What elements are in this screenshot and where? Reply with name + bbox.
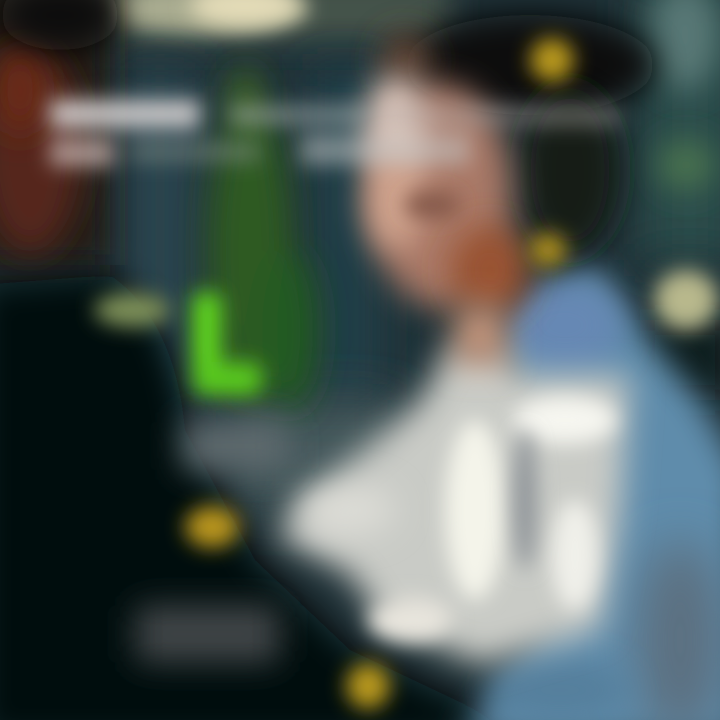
left person: dark jacket [0, 275, 540, 720]
woman: white blouse [275, 345, 630, 665]
icon: faint green marker right [658, 141, 714, 189]
callout: grey text block upper [182, 422, 287, 470]
heading: blurred white title [50, 100, 620, 166]
icon: yellow marker bottom [346, 663, 390, 709]
callout: grey text block lower [135, 605, 280, 663]
woman: face and neck [365, 75, 530, 365]
woman: hair [380, 15, 655, 255]
icon: yellow marker lower left [185, 506, 239, 548]
plant: green foliage [208, 68, 318, 410]
left person: hair and face [0, 0, 120, 265]
label: pale green text left of logo [94, 293, 170, 327]
icon: bright green logo [192, 292, 262, 396]
woman: blue jacket [460, 262, 720, 720]
icon: yellow marker top [530, 38, 574, 82]
icon: pale marker right [654, 270, 718, 330]
icon: yellow marker middle [529, 233, 567, 267]
